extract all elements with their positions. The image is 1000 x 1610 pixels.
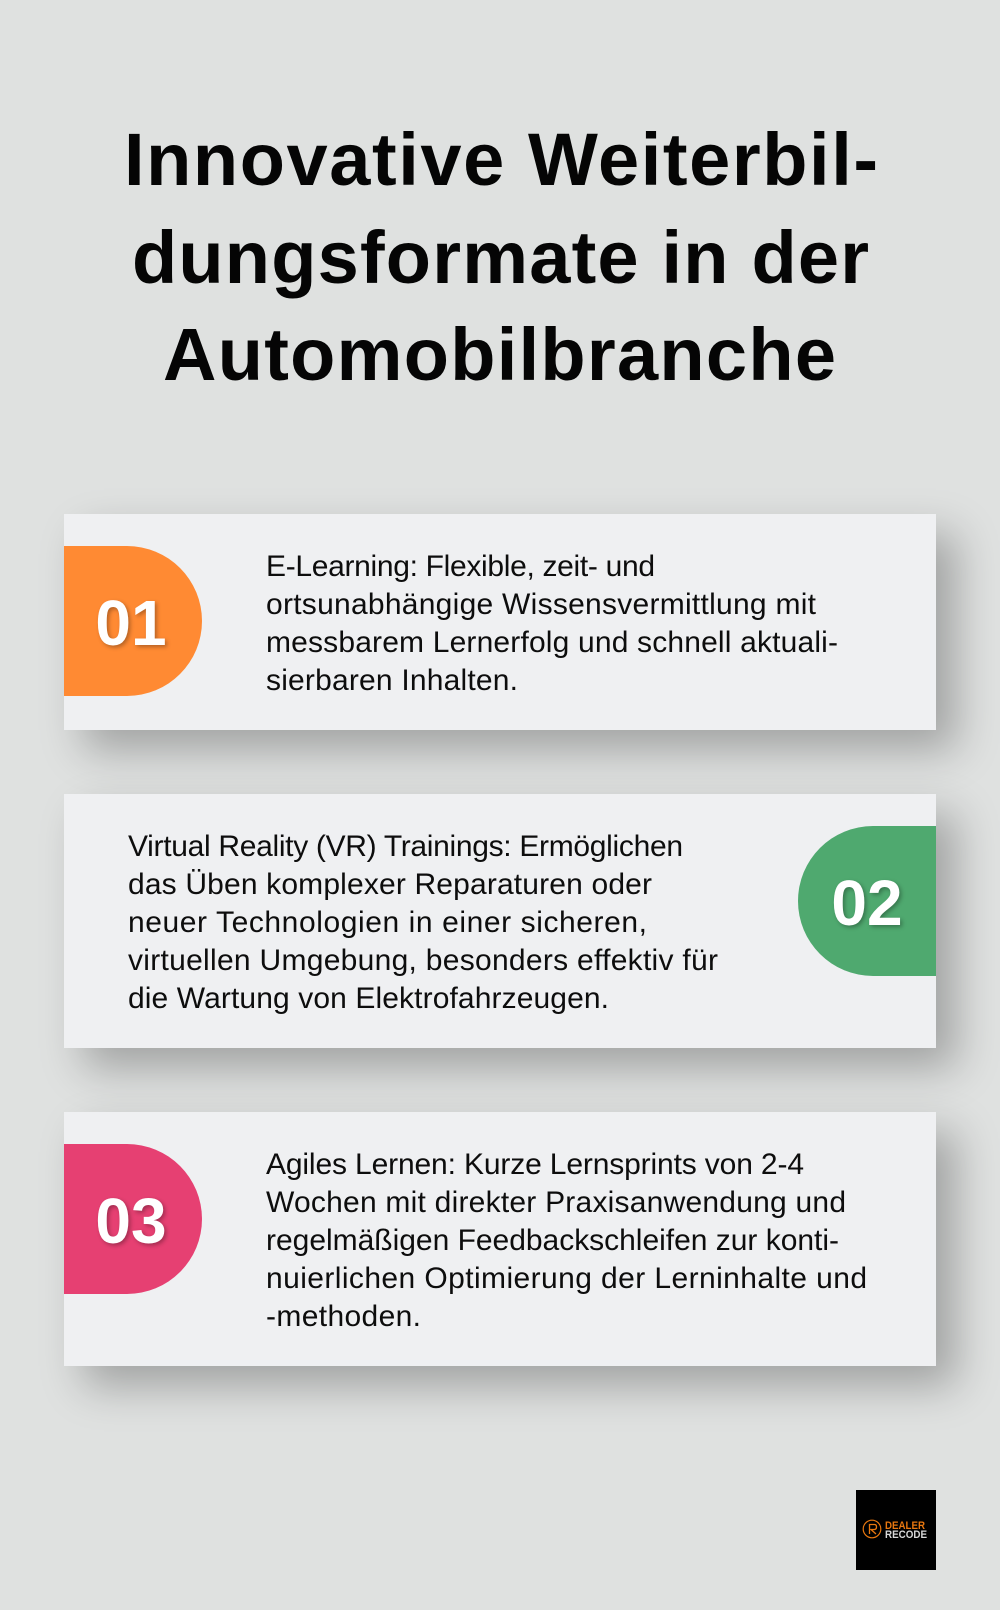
text: card 1 — [266, 550, 838, 697]
text: card 3: regelmäßigen Feedbackschleifen zur konti- — [266, 1224, 839, 1257]
text: card 1: ortsunabhängige Wissensvermittlung mit — [266, 588, 817, 621]
logo: dealer recode: RECODE — [885, 1529, 927, 1541]
title: Innovative Weiterbil- — [124, 118, 878, 201]
text: card 1: messbarem Lernerfolg und schnell aktuali- — [266, 626, 838, 659]
badge: 03 — [64, 1144, 202, 1294]
number 03: 03 — [95, 1185, 167, 1257]
title — [124, 118, 878, 396]
logo: dealer recode — [856, 1490, 936, 1570]
text: card 2: das Üben komplexer Reparaturen oder — [128, 868, 652, 901]
text: card 1: E-Learning: Flexible, zeit- und — [266, 550, 655, 583]
badge: 01 — [64, 546, 202, 696]
title: dungsformate in der — [132, 216, 869, 299]
text: card 3: Wochen mit direkter Praxisanwendung und — [266, 1186, 846, 1219]
text: card 2: die Wartung von Elektrofahrzeugen. — [128, 982, 609, 1015]
logo: dealer recode: DEALER — [885, 1520, 925, 1532]
title: Automobilbranche — [163, 313, 836, 396]
panel: card 2 virtual reality — [64, 794, 936, 1048]
text: card 2: neuer Technologien in einer sicheren, — [128, 906, 647, 939]
text: card 2: virtuellen Umgebung, besonders effektiv für — [128, 944, 718, 977]
number 01: 01 — [95, 587, 167, 659]
panel: card 1 e-learning — [64, 514, 936, 730]
text: card 3: nuierlichen Optimierung der Lerninhalte und — [266, 1262, 867, 1295]
text: card 3 — [266, 1148, 867, 1333]
text: card 3: Agiles Lernen: Kurze Lernsprints von 2-4 — [266, 1148, 804, 1181]
text: card 3: -methoden. — [266, 1300, 421, 1333]
number 02: 02 — [831, 867, 903, 939]
text: card 2 — [128, 830, 718, 1015]
panel: card 3 agiles lernen — [64, 1112, 936, 1366]
text: card 2: Virtual Reality (VR) Trainings: Ermöglichen — [128, 830, 683, 863]
text: card 1: sierbaren Inhalten. — [266, 664, 518, 697]
badge: 02 — [798, 826, 936, 976]
